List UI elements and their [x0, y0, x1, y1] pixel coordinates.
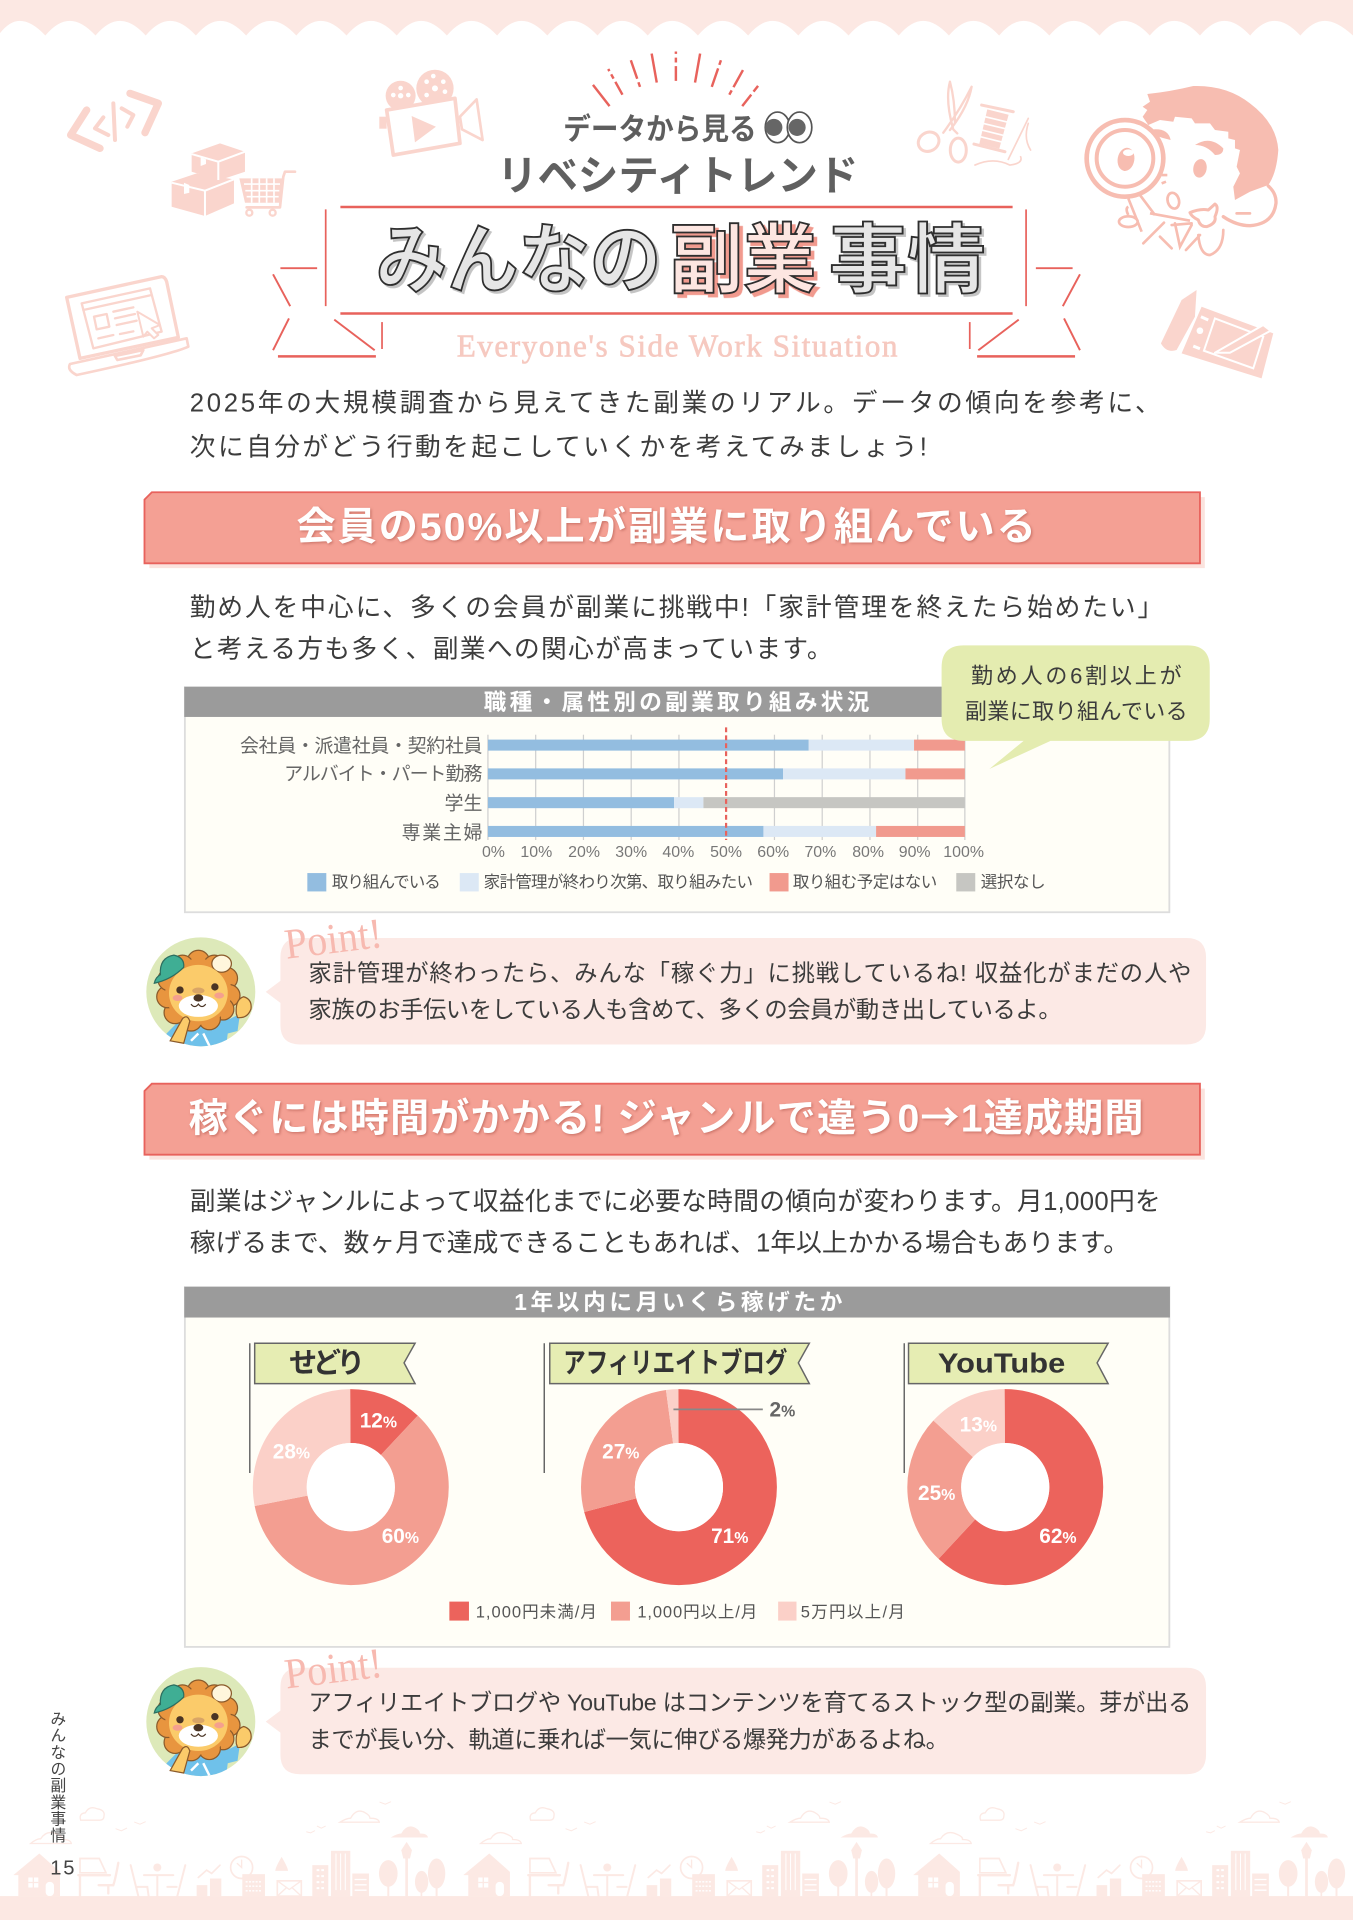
axis labels: 100% — [943, 844, 984, 861]
title ribbon frame — [273, 207, 1080, 356]
axis labels: 60% — [757, 844, 789, 861]
axis labels: 70% — [804, 844, 836, 861]
point label: Point! — [282, 1640, 385, 1698]
panel: stacked bar chart — [184, 687, 1170, 912]
legend: 1,000円以上/月 — [637, 1603, 757, 1622]
chart header — [184, 1287, 1170, 1318]
section 1 paragraph: 勤め人を中心に、多くの会員が副業に挑戦中!「家計管理を終えたら始めたい」 — [190, 593, 1163, 622]
section 2 paragraph: 稼げるまで、数ヶ月で達成できることもあれば、1年以上かかる場合もあります。 — [190, 1228, 1129, 1257]
50% reference line — [725, 727, 727, 840]
section heading 1: 会員の50%以上が副業に取り組んでいる — [296, 506, 1036, 549]
axis labels: 30% — [615, 844, 647, 861]
tag: sedori: せどり — [289, 1348, 365, 1379]
section 1 paragraph — [190, 593, 1163, 664]
legend: 5万円以上/月 — [801, 1603, 905, 1622]
axis labels: 90% — [899, 844, 931, 861]
point text: 家族のお手伝いをしている人も含めて、多くの会員が動き出しているよ。 — [309, 997, 1062, 1023]
lion mascot — [146, 1667, 255, 1783]
intro text: 次に自分がどう行動を起こしていくかを考えてみましょう! — [190, 433, 927, 462]
point label: Point! — [282, 910, 385, 969]
callout: green speech bubble — [942, 645, 1210, 769]
side label: みんなの副業事情 — [48, 1711, 66, 1844]
top scalloped band — [0, 0, 1353, 36]
section heading 2: 稼ぐには時間がかかる! ジャンルで違う0→1達成期間 — [189, 1087, 1144, 1143]
point bubble — [266, 1668, 1206, 1774]
donut: sedori: 12% — [360, 1410, 397, 1433]
section 2 paragraph: 副業はジャンルによって収益化までに必要な時間の傾向が変わります。月1,000円を — [190, 1187, 1161, 1216]
section 2 paragraph — [190, 1187, 1161, 1257]
row labels: 学生 — [444, 792, 482, 814]
donut: youtube — [918, 1413, 1077, 1558]
donut: sedori: 28% — [273, 1440, 310, 1463]
page number: 15 — [50, 1858, 76, 1880]
title: kicker: データから見る — [563, 113, 757, 147]
legend: 1,000円未満/月 — [476, 1603, 597, 1622]
section heading 2 — [144, 1084, 1205, 1160]
axis labels: 10% — [520, 844, 552, 861]
lion mascot — [146, 937, 255, 1053]
icon: laptop — [67, 277, 188, 375]
illustration: man with magnifying glass — [1087, 86, 1278, 255]
legend: 取り組む予定はない — [793, 873, 937, 892]
axis labels: 50% — [710, 844, 742, 861]
tag: youtube: YouTube — [938, 1348, 1065, 1379]
donut: youtube: 25% — [918, 1482, 955, 1505]
row labels — [240, 735, 482, 844]
legend — [307, 873, 1046, 892]
donut: youtube: 13% — [960, 1413, 997, 1436]
legend: 取り組んでいる — [332, 873, 441, 892]
chart header: 職種・属性別の副業取り組み状況 — [484, 689, 870, 715]
donut: youtube: 62% — [1039, 1525, 1077, 1548]
row labels: 専業主婦 — [402, 822, 482, 844]
tag: sedori — [250, 1343, 415, 1473]
panel: donut charts — [184, 1287, 1170, 1647]
point text: アフィリエイトブログや YouTube はコンテンツを育てるストック型の副業。芽が出る — [309, 1690, 1191, 1716]
axis labels: 40% — [662, 844, 694, 861]
intro text: 2025年の大規模調査から見えてきた副業のリアル。データの傾向を参考に、 — [190, 388, 1161, 417]
main title: 事情 — [829, 219, 986, 304]
legend: 家計管理が終わり次第、取り組みたい — [484, 873, 753, 892]
chart header — [184, 687, 1170, 717]
point text — [309, 1690, 1191, 1752]
tag: affiliate blog — [544, 1343, 809, 1473]
bars — [488, 740, 965, 837]
icon: video camera — [379, 70, 483, 155]
main title: 副業 — [670, 219, 817, 304]
main title — [376, 219, 986, 304]
donut: affiliate blog — [602, 1399, 795, 1558]
section 1 paragraph: と考える方も多く、副業への関心が高まっています。 — [190, 635, 833, 664]
icon: code brackets — [71, 93, 158, 148]
point text — [309, 960, 1191, 1023]
axis labels — [482, 844, 984, 861]
axis labels: 80% — [852, 844, 884, 861]
icon: eyes — [765, 112, 812, 143]
title: series name: リベシティトレンド — [497, 152, 858, 199]
legend — [449, 1602, 905, 1622]
section heading 1 — [144, 492, 1205, 568]
grid lines — [488, 735, 965, 840]
donut: affiliate blog: 2% — [770, 1399, 795, 1422]
icon: boxes and shopping cart — [172, 143, 295, 216]
main title: みんなの — [376, 219, 661, 304]
donut: sedori — [273, 1410, 422, 1558]
point callout 2 — [146, 1640, 1206, 1783]
point text: 家計管理が終わったら、みんな「稼ぐ力」に挑戦しているね! 収益化がまだの人や — [309, 960, 1191, 986]
title: sunburst rays — [593, 51, 759, 106]
point callout 1 — [146, 910, 1206, 1053]
tag: youtube — [904, 1343, 1108, 1473]
donut: affiliate blog: 27% — [602, 1440, 639, 1463]
callout: green speech bubble: 勤め人の6割以上が — [971, 663, 1182, 688]
row labels: アルバイト・パート勤務 — [284, 763, 482, 785]
row labels: 会社員・派遣社員・契約社員 — [240, 735, 482, 757]
footer townscape — [0, 1802, 1353, 1920]
intro text — [190, 388, 1161, 462]
tag: affiliate blog: アフィリエイトブログ — [563, 1347, 787, 1379]
callout: green speech bubble: 副業に取り組んでいる — [965, 699, 1188, 724]
point bubble — [266, 938, 1206, 1044]
donut: affiliate blog: 71% — [711, 1525, 748, 1548]
point text: までが長い分、軌道に乗れば一気に伸びる爆発力があるよね。 — [309, 1726, 949, 1752]
axis labels: 20% — [568, 844, 600, 861]
english subtitle: Everyone's Side Work Situation — [457, 328, 898, 363]
donut: sedori: 60% — [382, 1525, 419, 1548]
axis labels: 0% — [482, 844, 505, 861]
legend: 選択なし — [981, 873, 1046, 892]
chart header: 1年以内に月いくら稼げたか — [514, 1289, 843, 1315]
icon: tablet and pen — [1161, 290, 1273, 378]
icon: scissors and thread — [915, 82, 1031, 165]
